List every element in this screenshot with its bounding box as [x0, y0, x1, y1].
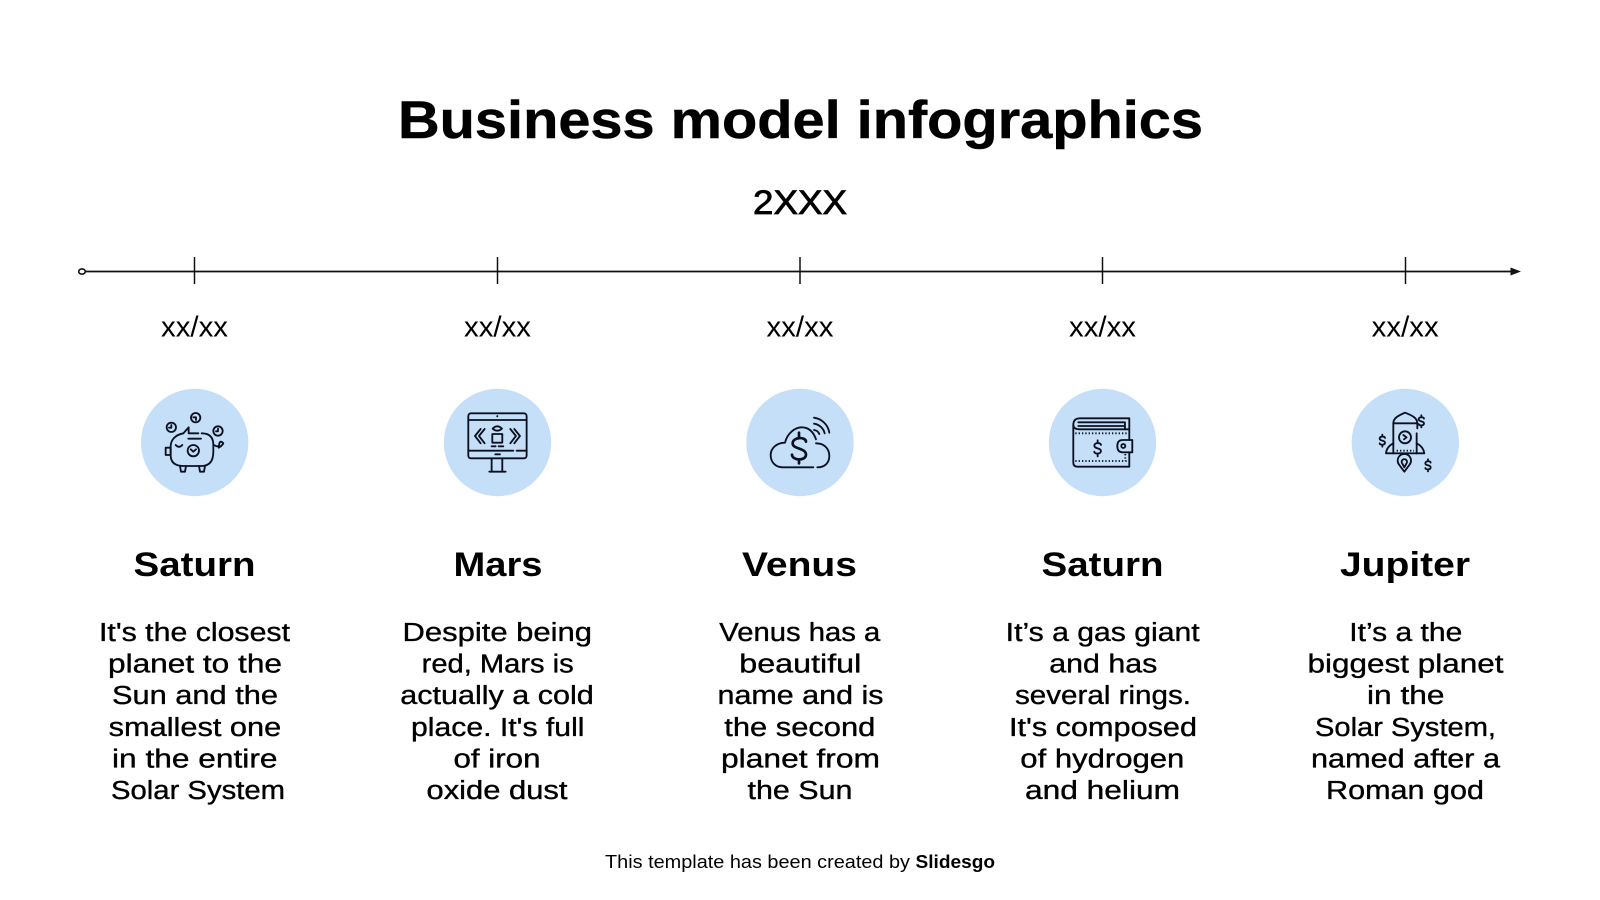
- description: [718, 619, 884, 805]
- date: xx/xx: [1372, 312, 1439, 344]
- date: xx/xx: [766, 312, 834, 344]
- date: xx/xx: [1069, 312, 1137, 344]
- description: and has: [1049, 651, 1157, 679]
- panel: Jupiter: [1308, 312, 1504, 805]
- panel: Venus: [718, 312, 884, 805]
- heading: Saturn: [1042, 546, 1164, 584]
- description: actually a cold: [400, 682, 594, 710]
- description: and helium: [1025, 777, 1180, 805]
- description: Venus has a: [719, 619, 881, 647]
- icon: piggy bank: [141, 389, 248, 496]
- heading: Mars: [454, 546, 542, 584]
- description: of hydrogen: [1020, 745, 1184, 773]
- footer credit: This template has been created by: [605, 852, 910, 872]
- description: red, Mars is: [422, 651, 574, 679]
- date: xx/xx: [161, 312, 229, 344]
- description: the second: [724, 714, 875, 742]
- description: It’s a the: [1349, 619, 1462, 647]
- icon: rocket: [1352, 389, 1459, 496]
- heading: Saturn: [134, 546, 256, 584]
- icon: cloud with dollar: [746, 389, 854, 496]
- description: It's composed: [1009, 714, 1197, 742]
- description: several rings.: [1015, 682, 1191, 710]
- description: Roman god: [1326, 777, 1484, 805]
- description: [99, 619, 290, 805]
- description: Solar System: [111, 777, 285, 805]
- description: It’s a gas giant: [1006, 619, 1200, 647]
- description: It's the closest: [99, 619, 290, 647]
- description: place. It's full: [411, 714, 584, 742]
- description: biggest planet: [1308, 651, 1504, 679]
- description: [1308, 619, 1504, 805]
- heading: Venus: [742, 546, 857, 584]
- description: of iron: [454, 745, 540, 773]
- description: Sun and the: [112, 682, 278, 710]
- description: beautiful: [739, 651, 861, 679]
- description: [400, 619, 594, 805]
- footer credit: Slidesgo: [916, 852, 995, 872]
- description: Solar System,: [1315, 714, 1496, 742]
- description: planet from: [721, 745, 880, 773]
- description: Despite being: [402, 619, 592, 647]
- description: named after a: [1311, 745, 1501, 773]
- description: in the: [1367, 682, 1444, 710]
- panel: Saturn 1: [99, 312, 290, 805]
- description: planet to the: [108, 651, 282, 679]
- year label: 2XXX: [753, 184, 847, 222]
- description: smallest one: [109, 714, 281, 742]
- description: [1006, 619, 1200, 805]
- timeline arrow: [79, 257, 1521, 284]
- description: name and is: [718, 682, 884, 710]
- panel: Mars: [400, 312, 594, 805]
- title: Business model infographics: [398, 91, 1203, 150]
- icon: monitor: [444, 389, 551, 496]
- description: oxide dust: [426, 777, 568, 805]
- heading: Jupiter: [1340, 546, 1470, 584]
- description: the Sun: [748, 777, 852, 805]
- icon: wallet: [1049, 389, 1156, 496]
- date: xx/xx: [464, 312, 532, 344]
- panel: Saturn 2: [1006, 312, 1200, 805]
- description: in the entire: [112, 745, 278, 773]
